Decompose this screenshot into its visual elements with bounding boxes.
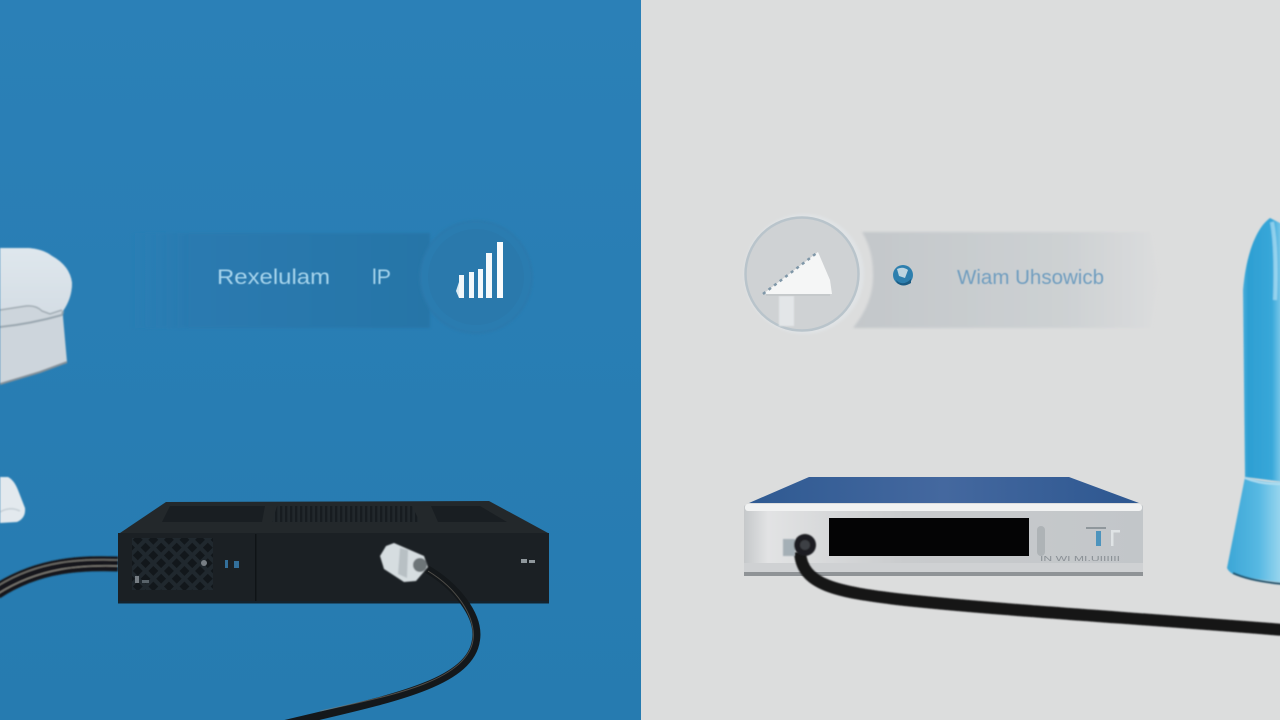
panel: left blue background [0,0,641,720]
box top face [120,501,548,533]
icon: blue rocket-shaped antenna [1227,218,1280,584]
icon: signal bars badge [420,221,532,333]
icon: globe [893,265,913,286]
cable connector [380,543,428,582]
icon: antenna badge [744,214,864,334]
router side button [1037,526,1045,556]
top vent centre [272,506,420,522]
dotted wedge edge [763,252,818,294]
router lower lip [744,563,1143,572]
panel seam [255,534,256,601]
box front face [118,533,549,603]
router front highlight [745,504,1142,511]
left label text: Rexelulam [217,266,330,289]
icon: black set-top box [0,501,549,720]
panel: right grey background [641,0,1280,720]
left label secondary text: lP [372,266,391,289]
right label text: Wiam Uhsowicb [957,267,1104,289]
right indicator [521,559,535,563]
router cable [800,552,1280,630]
icon: white device lower left [0,477,25,523]
front mesh grille [132,538,213,590]
white wedge [763,252,832,294]
icon: white device upper left [0,248,72,384]
left multi-strand cable [0,560,118,595]
black cable [285,568,476,720]
router small print: IN WI MI.UIIIIII [1040,556,1120,563]
panel: left label pill [130,221,532,333]
router display [829,518,1029,556]
router top face [749,477,1139,503]
router blue logo [1086,527,1120,546]
blue indicator lights [225,560,239,568]
top vent left [162,506,265,522]
wedge stand [779,296,794,326]
icon: silver router with blue top [744,477,1280,630]
router front face [744,505,1143,576]
panel: right label pill [853,232,1158,328]
router port connector [783,534,816,556]
grille port lights [135,560,207,583]
top vent right [431,506,507,522]
